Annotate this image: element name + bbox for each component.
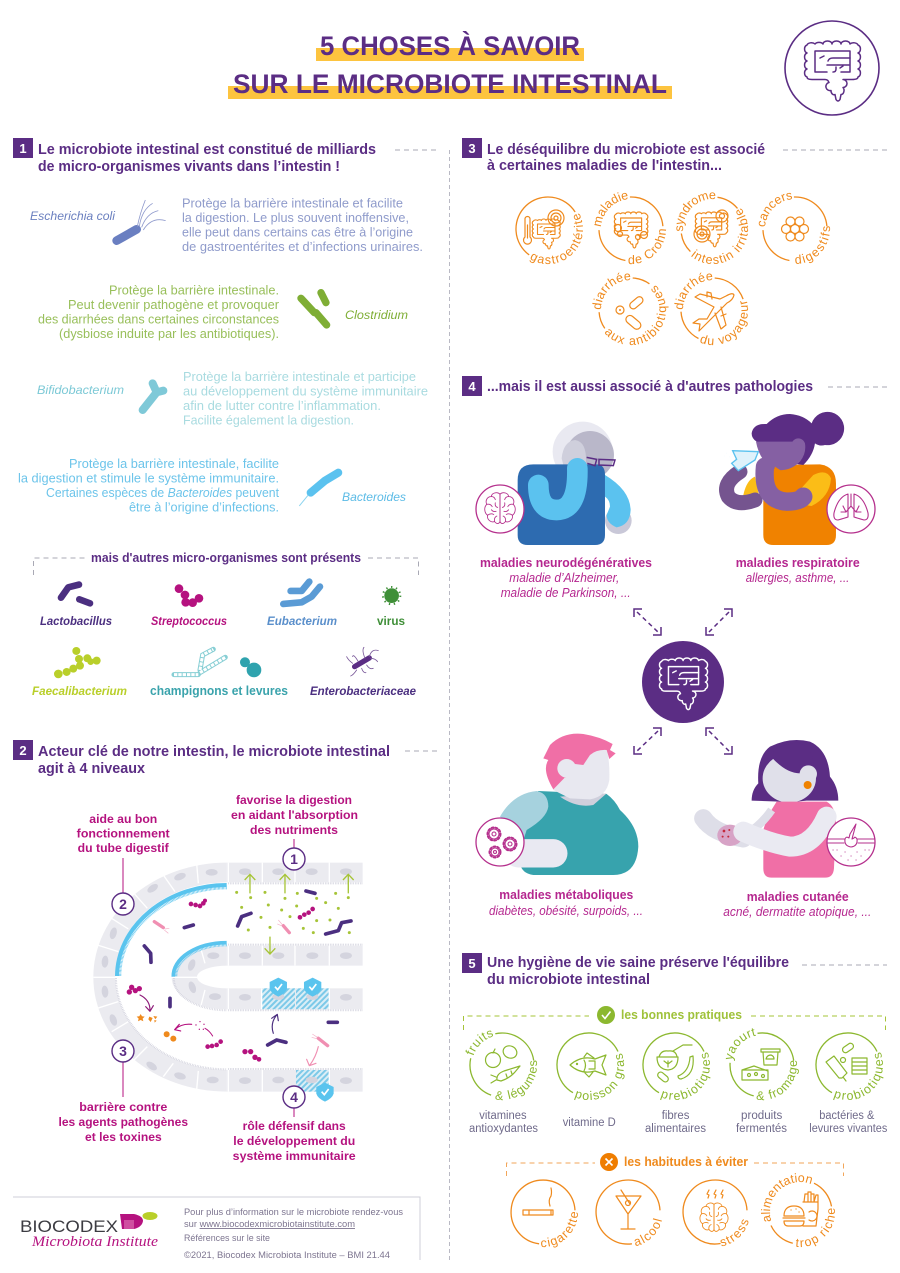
heading: section 5: du microbiote intestinal <box>487 972 650 988</box>
callout: level 4 defence: 4 <box>290 1089 298 1105</box>
species: champignons et levures <box>150 649 288 698</box>
panel: section 4 other pathologies <box>462 376 887 919</box>
labels: nutrients under good practices: fermentés <box>736 1123 787 1135</box>
icon: syndrome intestin irritable <box>676 192 748 264</box>
caption: neurodegenerative diseases: maladie d’Alzheimer, <box>509 571 619 585</box>
icon: central intestine <box>642 641 724 723</box>
labels: nutrients under good practices: antioxydantes <box>469 1123 538 1135</box>
icon: stress: stress <box>720 1219 748 1246</box>
heading: les bonnes pratiques <box>464 1006 886 1030</box>
icon: yaourt et fromage: yaourt <box>726 1028 756 1061</box>
icon: probiotiques: probiotiques <box>833 1052 884 1100</box>
heading: les bonnes pratiques: les bonnes pratiques <box>621 1007 742 1022</box>
caption: respiratory diseases: maladies respiratoire <box>736 556 860 570</box>
panel: section 3 intestinal diseases <box>462 138 887 346</box>
icon: diarrhée aux antibiotiques: aux antibiotiques <box>605 286 669 346</box>
species: Bifidobacterium: Protège la barrière intestinale et participe <box>183 370 416 384</box>
species: Clostridium: (dysbiose induite par les antibiotiques). <box>59 327 279 341</box>
species: Bifidobacterium: Bifidobacterium <box>37 383 124 397</box>
panel: footer <box>13 1197 420 1260</box>
icon: fruits et légumes: fruits <box>466 1030 493 1056</box>
figure: woman sneezing, respiratory <box>725 412 844 545</box>
heading: section 3: Le déséquilibre du microbiote est associé <box>487 142 765 158</box>
icon: fruits et légumes: & légumes <box>495 1060 538 1100</box>
caption: metabolic diseases: maladies métaboliques <box>499 888 633 902</box>
icon: cancers digestifs: digestifs <box>795 226 830 264</box>
species: Lactobacillus: Lactobacillus <box>40 614 112 628</box>
callout: level 2 digestive tube <box>77 812 170 915</box>
icon: intestine in circle <box>785 21 879 115</box>
heading: section 3: à certaines maladies de l'intestin... <box>487 158 722 174</box>
species: Enterobacteriaceae: Enterobacteriaceae <box>310 684 416 698</box>
species: Escherichia coli: la digestion. Le plus souvent inoffensive, <box>182 211 409 225</box>
species: virus <box>377 587 405 628</box>
icon: diarrhée du voyageur: du voyageur <box>700 301 748 346</box>
callout: level 4 defence: le développement du <box>233 1134 355 1148</box>
icon: yaourt et fromage <box>726 1028 799 1100</box>
icon: diarrhée du voyageur: diarrhée <box>674 272 712 310</box>
species: Bacteroides <box>18 457 406 514</box>
species: Bifidobacterium: au développement du système immunitaire <box>183 384 428 398</box>
species: Bacteroides: Protège la barrière intestinale, facilite <box>69 457 279 471</box>
text: footer information <box>184 1207 404 1260</box>
species: Clostridium: Protège la barrière intestinale. <box>109 284 279 298</box>
species: Bacteroides: Bacteroides <box>342 490 406 504</box>
icon: poisson gras: poisson gras <box>574 1054 625 1100</box>
species: Bacteroides: la digestion et stimule le système immunitaire. <box>18 472 279 486</box>
icon: skin hair follicle <box>827 818 875 866</box>
icon: cigarette <box>510 1179 578 1248</box>
species: Bifidobacterium: afin de lutter contre l’inflammation. <box>183 399 381 413</box>
heading: section 1: de micro-organismes vivants dans l’intestin ! <box>38 159 340 175</box>
figure: overweight man, metabolic <box>500 734 638 875</box>
callout: level 3 barrier: barrière contre <box>79 1100 168 1114</box>
species: Bacteroides: être à l’origine d’infections. <box>129 500 279 514</box>
species: champignons et levures: champignons et levures <box>150 684 288 698</box>
icon: syndrome intestin irritable: intestin irritable <box>691 208 748 264</box>
logo: Biocodex Microbiota Institute: BIOCODEX <box>20 1217 118 1236</box>
icon: prebiotiques <box>642 1032 710 1100</box>
icon: fruits et légumes <box>466 1030 538 1100</box>
heading: other micro-organisms: mais d'autres micro-organismes sont présents <box>91 551 361 565</box>
caption: metabolic diseases <box>489 888 643 918</box>
heading: section 4: ...mais il est aussi associé à d'autres pathologies <box>487 379 813 395</box>
icon: yaourt et fromage: & fromage <box>756 1060 799 1100</box>
species: Clostridium <box>38 284 408 341</box>
icon: alimentation trop riche <box>761 1173 835 1248</box>
icon: cancers digestifs: cancers <box>758 192 792 226</box>
icon: diarrhée aux antibiotiques: diarrhée <box>592 272 630 310</box>
species: Escherichia coli: Escherichia coli <box>30 209 115 223</box>
icon: alcool <box>595 1179 662 1246</box>
caption: respiratory diseases: allergies, asthme, ... <box>746 571 849 585</box>
callout: level 1 digestion: favorise la digestion <box>236 793 352 807</box>
heading: section 5: Une hygiène de vie saine préserve l'équilibre <box>487 955 789 971</box>
text: footer information: sur www.biocodexmicrobiotainstitute.com <box>184 1219 355 1229</box>
icon: diarrhée du voyageur <box>674 272 748 346</box>
species: Clostridium: Clostridium <box>345 308 408 322</box>
caption: respiratory diseases <box>736 556 860 585</box>
heading: les habitudes à éviter: les habitudes à éviter <box>624 1154 748 1169</box>
icon: maladie de Crohn <box>594 192 666 264</box>
heading: section 3: 3 <box>468 141 476 156</box>
icon: maladie de Crohn: de Crohn <box>628 229 666 264</box>
species: Eubacterium <box>267 582 337 628</box>
labels: nutrients under good practices <box>469 1110 888 1135</box>
panel: section 5 healthy lifestyle <box>462 953 888 1248</box>
caption: neurodegenerative diseases <box>480 556 652 600</box>
callout: level 2 digestive tube: 2 <box>119 896 127 912</box>
labels: nutrients under good practices: bactéries & <box>819 1110 875 1122</box>
icon: alimentation trop riche: trop riche <box>796 1208 835 1248</box>
species: Bifidobacterium <box>37 370 428 428</box>
callout: level 1 digestion: en aidant l'absorption <box>231 808 358 822</box>
heading: section 1: Le microbiote intestinal est constitué de milliards <box>38 142 376 158</box>
species: Enterobacteriaceae <box>310 647 416 698</box>
icon: stress <box>682 1179 748 1246</box>
callout: level 4 defence <box>233 1086 356 1163</box>
callout: level 2 digestive tube: aide au bon <box>89 812 157 826</box>
icon: cigarette: cigarette <box>541 1212 578 1248</box>
icon: poisson gras <box>556 1032 625 1100</box>
labels: nutrients under good practices: vitamines <box>479 1110 527 1122</box>
callout: level 3 barrier: et les toxines <box>85 1130 162 1144</box>
species: Bacteroides: Certaines espèces de Bacteroides peuvent <box>46 486 280 500</box>
species: Faecalibacterium: Faecalibacterium <box>32 684 127 698</box>
labels: nutrients under good practices: alimentaires <box>645 1123 706 1135</box>
heading: section 4: 4 <box>468 379 476 394</box>
icon: gastroentérite <box>515 196 583 264</box>
icon: cancers digestifs <box>758 192 830 264</box>
callout: level 2 digestive tube: du tube digestif <box>78 841 170 855</box>
species: Clostridium: des diarrhées dans certaines circonstances <box>38 312 279 326</box>
figure: woman with skin condition <box>703 740 838 878</box>
species: virus: virus <box>377 614 405 628</box>
species: Faecalibacterium <box>32 647 127 698</box>
heading: section 2: agit à 4 niveaux <box>38 761 145 777</box>
title: SUR LE MICROBIOTE INTESTINAL <box>233 69 667 99</box>
icon: gastroentérite: gastroentérite <box>530 214 583 264</box>
species: Escherichia coli <box>30 196 423 254</box>
caption: skin diseases <box>723 890 871 919</box>
species: Lactobacillus <box>40 585 112 628</box>
icon: lungs <box>827 485 875 533</box>
labels: nutrients under good practices: vitamine D <box>563 1117 616 1129</box>
panel: section 1 micro-organisms <box>13 138 437 698</box>
heading: section 3 <box>462 138 887 174</box>
species: Escherichia coli: de gastroentérites et d’infections urinaires. <box>182 240 423 254</box>
icon: syndrome intestin irritable: syndrome <box>676 192 716 232</box>
icon: probiotiques <box>815 1032 884 1100</box>
labels: nutrients under good practices: produits <box>741 1110 783 1122</box>
heading: section 1: 1 <box>19 141 27 156</box>
panel: section 2 four levels <box>13 740 437 1163</box>
title: 5 CHOSES À SAVOIR <box>320 30 580 61</box>
callout: level 4 defence: système immunitaire <box>233 1149 356 1163</box>
species: Bifidobacterium: Facilite également la digestion. <box>183 414 354 428</box>
heading: section 5: 5 <box>468 956 476 971</box>
callout: level 4 defence: rôle défensif dans <box>243 1119 346 1133</box>
caption: skin diseases: maladies cutanée <box>747 890 849 904</box>
heading: section 2: Acteur clé de notre intestin, le microbiote intestinal <box>38 744 390 760</box>
species: Escherichia coli: elle peut dans certains cas être à l’origine <box>182 226 413 240</box>
icon: brain <box>476 485 524 533</box>
species: Streptococcus: Streptococcus <box>151 614 227 628</box>
callout: level 3 barrier <box>58 1040 188 1144</box>
callout: level 1 digestion <box>231 793 358 870</box>
heading: section 4 <box>462 376 887 396</box>
callout: level 2 digestive tube: fonctionnement <box>77 826 170 840</box>
labels: nutrients under good practices: fibres <box>662 1110 690 1122</box>
logo: Biocodex Microbiota Institute <box>20 1212 158 1250</box>
icon: alimentation trop riche: alimentation <box>761 1173 812 1222</box>
caption: metabolic diseases: diabètes, obésité, surpoids, ... <box>489 904 643 918</box>
species: Eubacterium: Eubacterium <box>267 614 337 628</box>
caption: neurodegenerative diseases: maladies neurodégénératives <box>480 556 652 570</box>
title <box>228 30 672 99</box>
arrows: dashed double arrows to pathologies <box>634 609 732 754</box>
species: Clostridium: Peut devenir pathogène et provoquer <box>68 298 279 312</box>
species: Escherichia coli: Protège la barrière intestinale et facilite <box>182 196 403 210</box>
text: footer information: Pour plus d’information sur le microbiote rendez-vous <box>184 1207 404 1217</box>
heading: section 2 <box>13 740 437 777</box>
chart: intestine cross-section diagram <box>93 863 363 1102</box>
callout: level 1 digestion: des nutriments <box>250 823 338 837</box>
figure: elderly man, neurodegenerative <box>518 422 632 545</box>
caption: skin diseases: acné, dermatite atopique, ... <box>723 905 871 919</box>
callout: level 3 barrier: 3 <box>119 1043 127 1059</box>
labels: nutrients under good practices: levures vivantes <box>809 1123 888 1135</box>
heading: other micro-organisms <box>34 551 418 575</box>
heading: les habitudes à éviter <box>506 1153 844 1176</box>
callout: level 1 digestion: 1 <box>290 851 298 867</box>
icon: prebiotiques: prebiotiques <box>660 1052 710 1100</box>
text: footer information: Références sur le site <box>184 1233 270 1243</box>
callout: level 3 barrier: les agents pathogènes <box>58 1115 188 1129</box>
text: footer information: ©2021, Biocodex Microbiota Institute – BMI 21.44 <box>184 1250 390 1260</box>
species: Streptococcus <box>151 584 227 628</box>
logo: Biocodex Microbiota Institute: Microbiota Institute <box>31 1234 158 1250</box>
icon: gears <box>476 818 524 866</box>
icon: maladie de Crohn: maladie <box>594 192 628 226</box>
icon: alcool: alcool <box>634 1218 662 1246</box>
caption: neurodegenerative diseases: maladie de Parkinson, ... <box>501 586 631 600</box>
heading: section 2: 2 <box>19 743 27 758</box>
heading: section 5 <box>462 953 887 988</box>
heading: section 1 <box>13 138 437 175</box>
